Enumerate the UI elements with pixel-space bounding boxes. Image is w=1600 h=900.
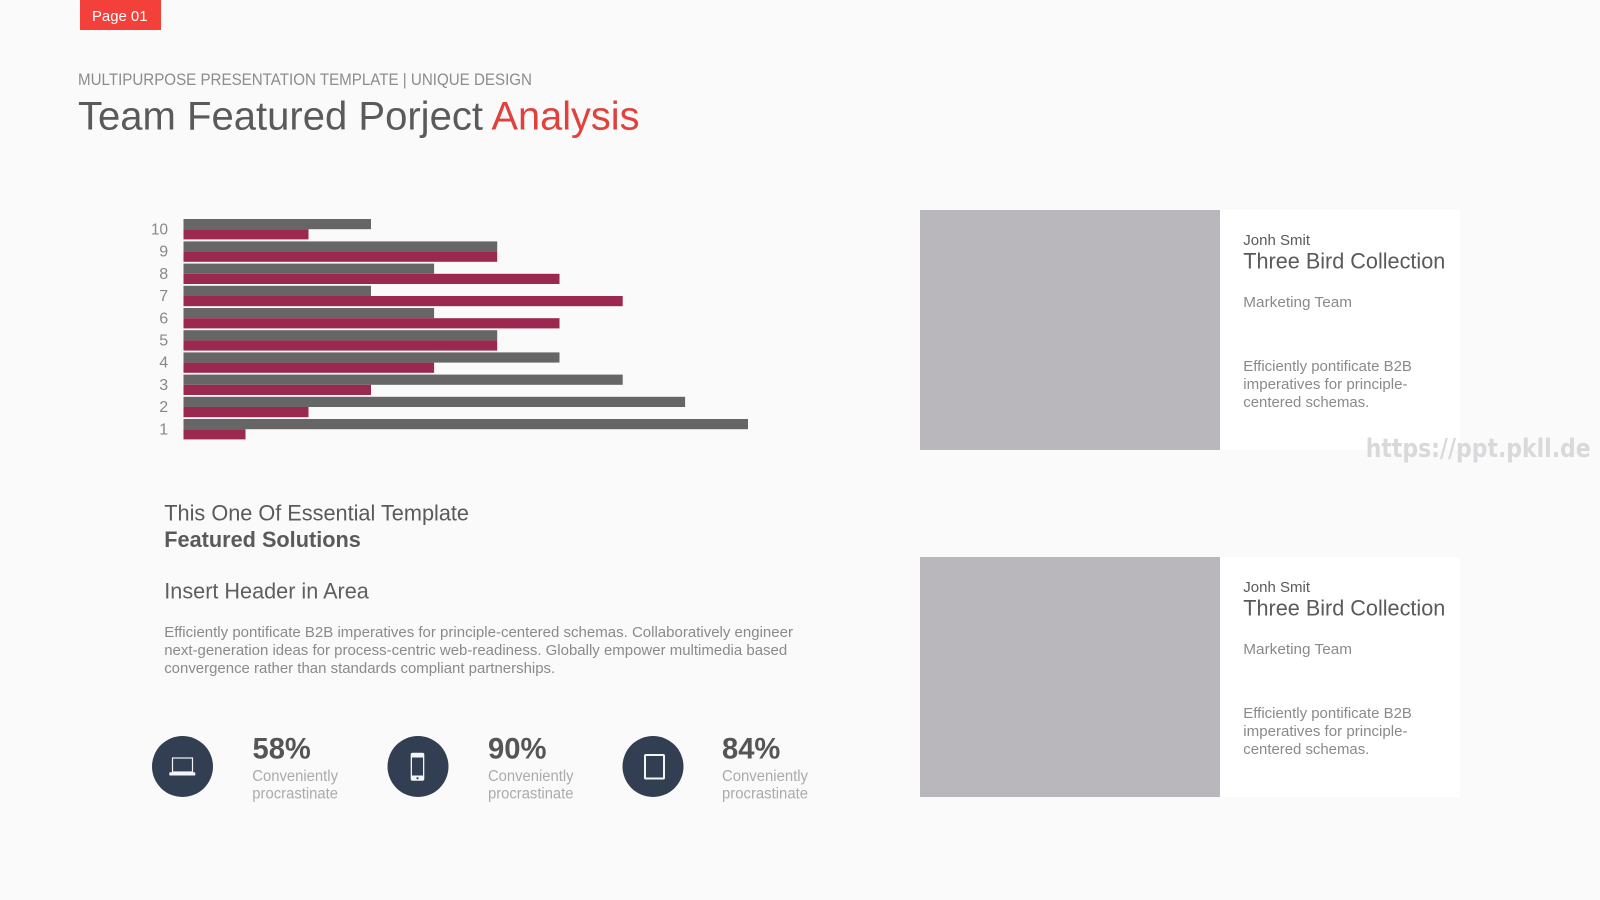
title: Team Featured Porject [78,94,483,138]
caption: procrastinate [252,786,338,802]
heading block: This One Of Essential Template [164,501,469,526]
description [1243,358,1412,411]
caption [488,768,574,802]
description: Efficiently pontificate B2B [1243,705,1412,722]
heading block: Featured Solutions [164,527,361,552]
eyebrow subtitle: MULTIPURPOSE PRESENTATION TEMPLATE | UNIQUE DESIGN [78,71,532,89]
description: centered schemas. [1243,741,1369,758]
body paragraph: next-generation ideas for process-centric web-readiness. Globally empower multimedia based [164,642,787,659]
image placeholder [920,210,1220,450]
title: Analysis [492,94,640,138]
project title: Three Bird Collection [1243,248,1445,273]
bar chart [151,219,748,439]
caption: Conveniently [722,768,808,785]
caption: procrastinate [488,786,574,802]
subheading: Insert Header in Area [164,579,370,604]
body paragraph: convergence rather than standards compliant partnerships. [164,660,555,677]
description: centered schemas. [1243,394,1369,411]
crimson series [184,229,623,439]
caption [722,768,808,802]
stat: laptop 58% [152,733,338,802]
heading block [164,501,469,552]
axis labels: 10 [151,222,168,238]
team: Marketing Team [1243,294,1352,311]
axis labels: 9 [159,244,168,261]
axis labels: 6 [159,310,168,327]
image placeholder [920,557,1220,797]
caption: Conveniently [252,768,338,785]
description [1243,705,1412,758]
caption: procrastinate [722,786,808,802]
description: Efficiently pontificate B2B [1243,358,1412,375]
axis labels: 1 [159,421,168,438]
value: 84% [722,733,780,766]
stat: phone 90% [388,733,574,802]
name: Jonh Smit [1243,579,1311,596]
axis labels: 4 [159,355,168,372]
axis labels [151,222,168,438]
panel: profile card 1 [920,210,1460,450]
axis labels: 8 [159,266,168,283]
description: imperatives for principle- [1243,723,1408,740]
icon: laptop [152,736,213,797]
value: 90% [488,733,546,766]
caption [252,768,338,802]
card background [1220,210,1460,450]
axis labels: 5 [159,332,168,350]
body paragraph: Efficiently pontificate B2B imperatives for principle-centered schemas. Collaboratively engineer [164,624,793,641]
card background [1220,557,1460,797]
value: 58% [252,733,311,766]
axis labels: 2 [159,399,168,416]
icon: tablet [622,736,684,797]
stat: tablet 84% [622,733,808,802]
team: Marketing Team [1243,641,1352,658]
body paragraph [164,624,793,677]
page tag [80,0,161,30]
panel: profile card 2 [920,557,1460,797]
caption: Conveniently [488,768,574,785]
icon: phone [388,736,448,797]
project title: Three Bird Collection [1243,595,1445,620]
axis labels: 7 [159,288,168,305]
page tag: Page 01 [92,8,148,25]
axis labels: 3 [159,377,168,394]
name: Jonh Smit [1243,232,1311,249]
description: imperatives for principle- [1243,376,1408,393]
grey series [184,219,748,429]
